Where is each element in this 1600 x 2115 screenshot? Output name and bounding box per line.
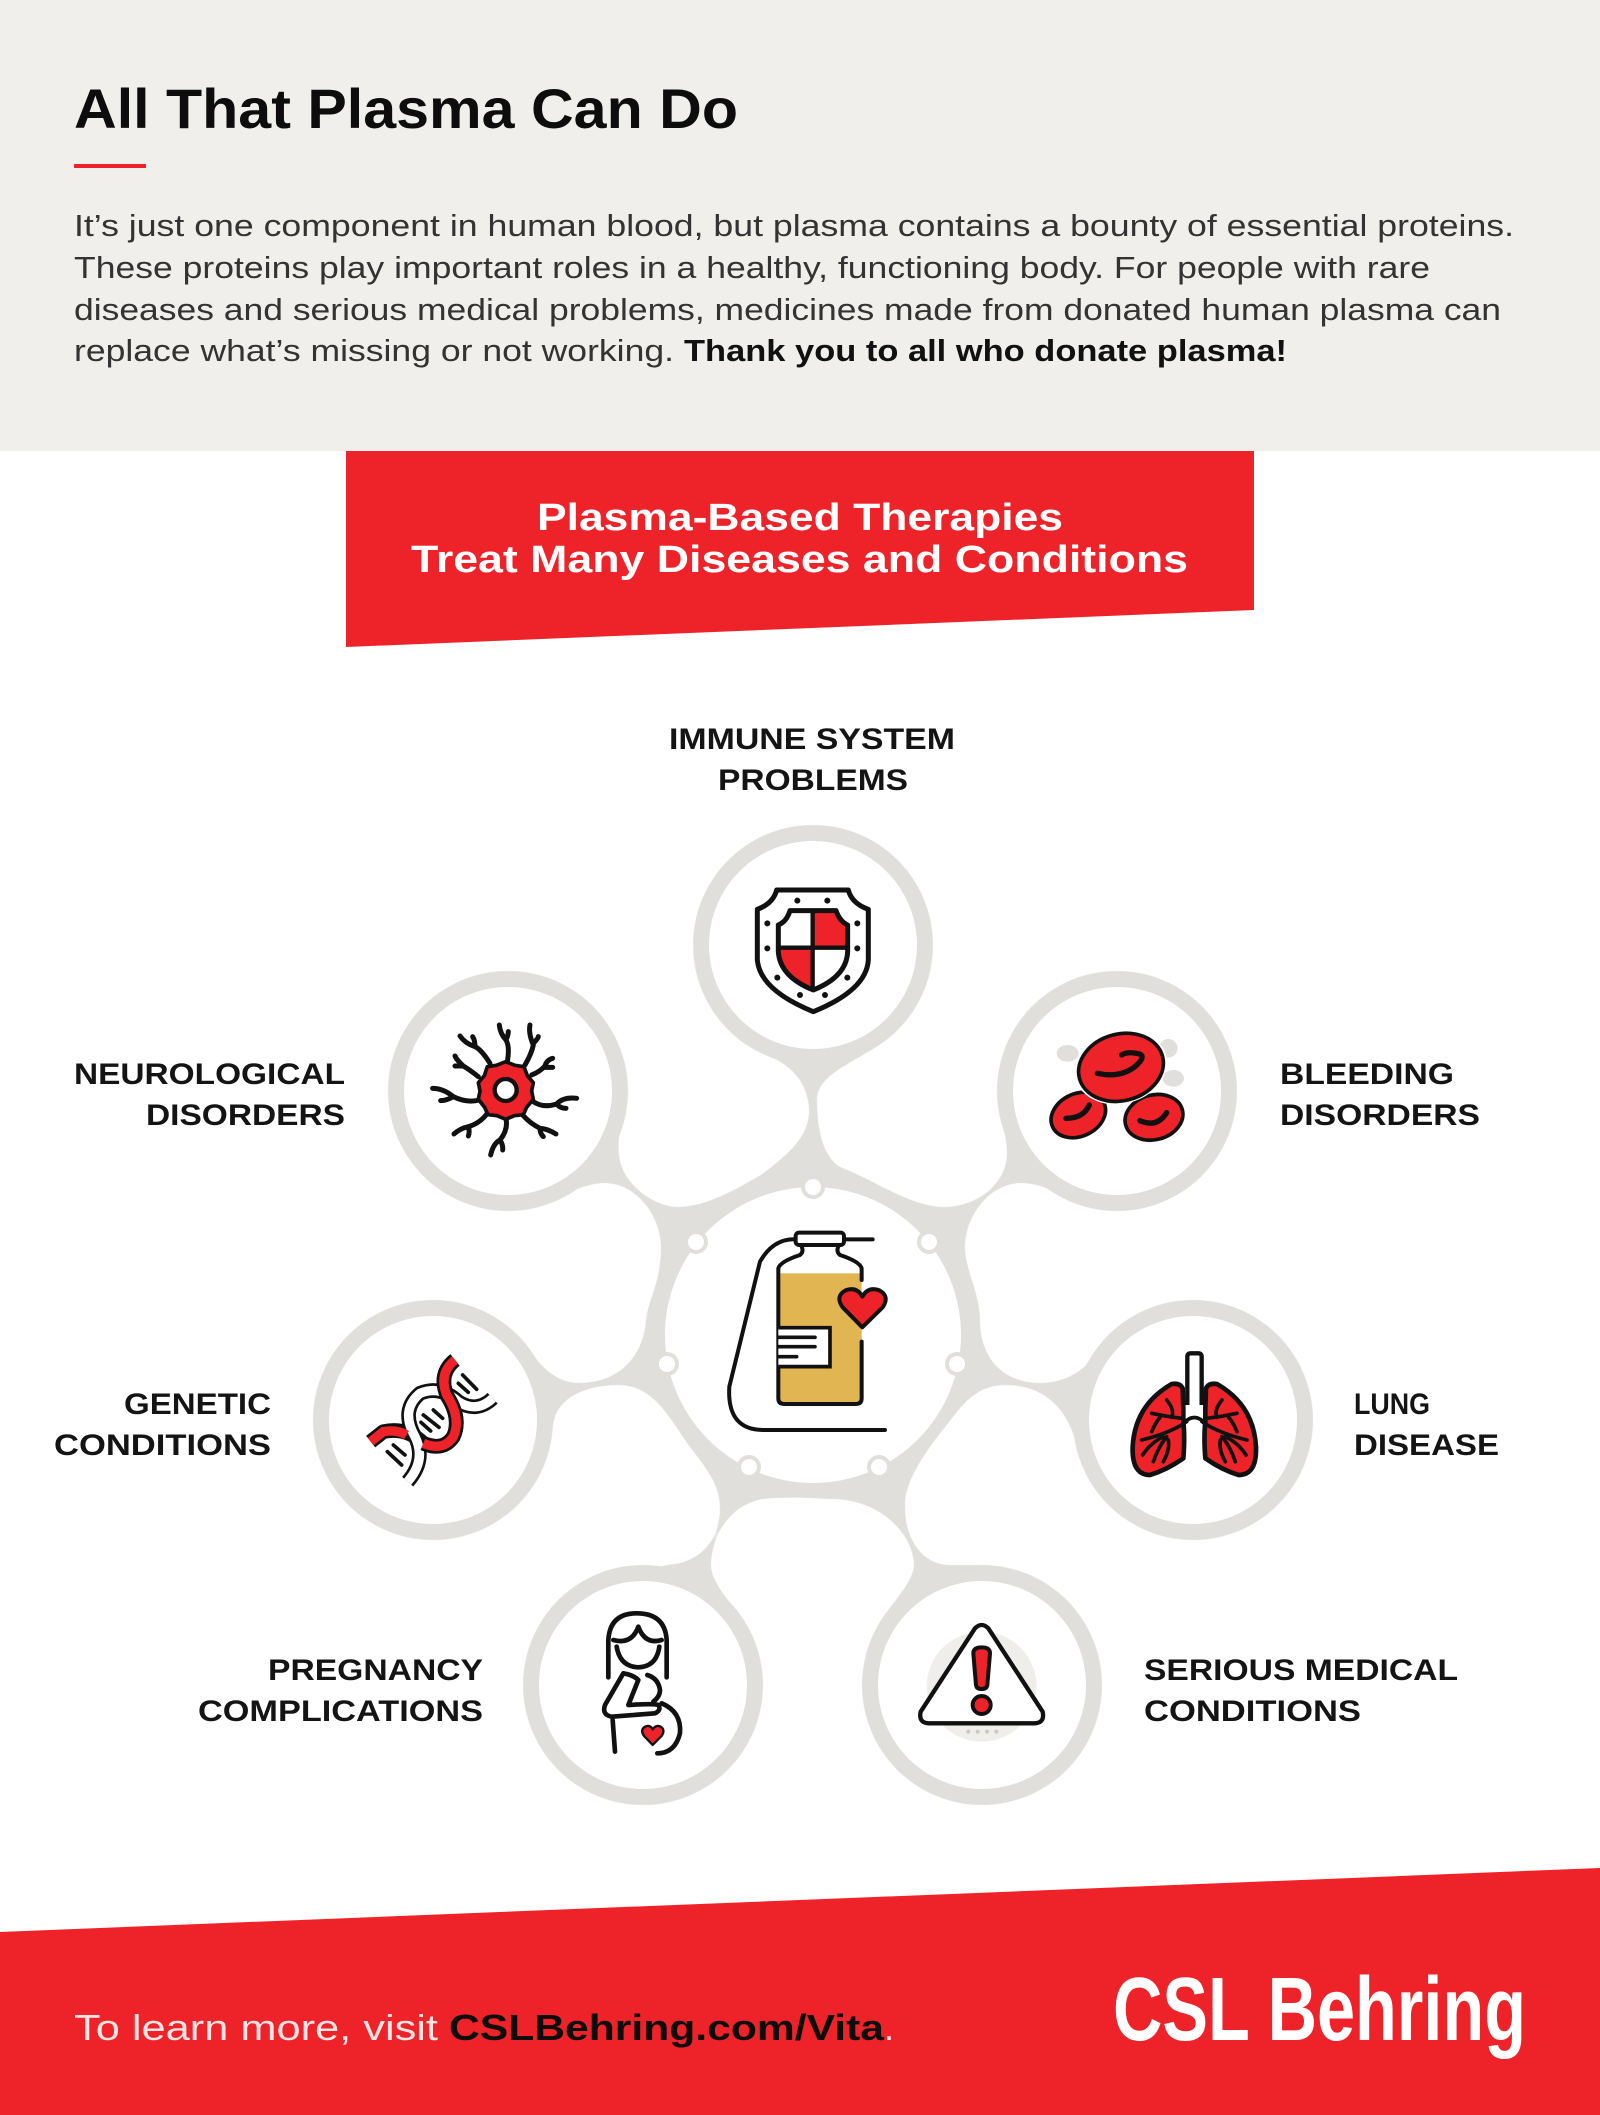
call to action: To learn more, visit: [74, 2007, 438, 2048]
group: immune system problems: [669, 723, 955, 1012]
footer band: [0, 1868, 1600, 2115]
label: GENETIC: [124, 1388, 271, 1421]
label: IMMUNE SYSTEM: [669, 723, 955, 756]
icon: red blood cells: [1044, 1020, 1188, 1146]
label: PREGNANCY: [268, 1654, 483, 1687]
group: bleeding disorders: [1044, 1020, 1480, 1146]
title accent rule: [74, 164, 146, 168]
call to action: .: [884, 2007, 894, 2048]
intro paragraph: These proteins play important roles in a healthy, functioning body. For people with rare: [74, 250, 1430, 285]
red banner: Treat Many Diseases and Conditions: [411, 539, 1188, 581]
title: All That Plasma Can Do: [74, 77, 738, 140]
panel: header intro: [0, 0, 1600, 451]
label: PROBLEMS: [718, 764, 908, 797]
label: [198, 1654, 483, 1728]
intro paragraph: It’s just one component in human blood, but plasma contains a bounty of essential proteins.: [74, 208, 1514, 243]
intro paragraph: replace what’s missing or not working.: [74, 333, 674, 368]
icon: neuron: [433, 1025, 577, 1155]
label: [54, 1388, 271, 1462]
label: [74, 1058, 345, 1132]
intro paragraph: Thank you to all who donate plasma!: [684, 333, 1287, 368]
intro paragraph: [74, 208, 1514, 368]
icon: shield: [757, 890, 868, 1012]
label: BLEEDING: [1280, 1058, 1454, 1091]
group: serious medical conditions: [920, 1625, 1458, 1742]
call to action: CSLBehring.com/Vita: [449, 2007, 885, 2048]
icon: lungs: [1133, 1353, 1256, 1475]
label: LUNG: [1354, 1388, 1430, 1421]
label: [1144, 1654, 1458, 1728]
label: DISEASE: [1354, 1429, 1499, 1462]
label: [669, 723, 955, 797]
label: CONDITIONS: [1144, 1695, 1361, 1728]
icon: pregnant woman: [604, 1613, 680, 1753]
icon: plasma bottle with heart: [729, 1233, 886, 1430]
icon: DNA helix: [371, 1360, 493, 1482]
label: COMPLICATIONS: [198, 1695, 483, 1728]
red banner: [346, 451, 1254, 647]
label: SERIOUS MEDICAL: [1144, 1654, 1458, 1687]
label: DISORDERS: [1280, 1099, 1480, 1132]
label: NEUROLOGICAL: [74, 1058, 345, 1091]
label: [1354, 1388, 1499, 1462]
group: genetic conditions: [54, 1360, 493, 1482]
group: lung disease: [1133, 1353, 1499, 1475]
label: CONDITIONS: [54, 1429, 271, 1462]
group: neurological disorders: [74, 1025, 577, 1155]
hub and spoke network: [313, 825, 1313, 1805]
label: DISORDERS: [146, 1099, 345, 1132]
group: pregnancy complications: [198, 1613, 680, 1753]
intro paragraph: diseases and serious medical problems, medicines made from donated human plasma can: [74, 292, 1501, 327]
call to action: [74, 2007, 894, 2048]
red banner: Plasma-Based Therapies: [537, 497, 1063, 539]
icon: warning triangle: [920, 1625, 1043, 1742]
label: [1280, 1058, 1480, 1132]
